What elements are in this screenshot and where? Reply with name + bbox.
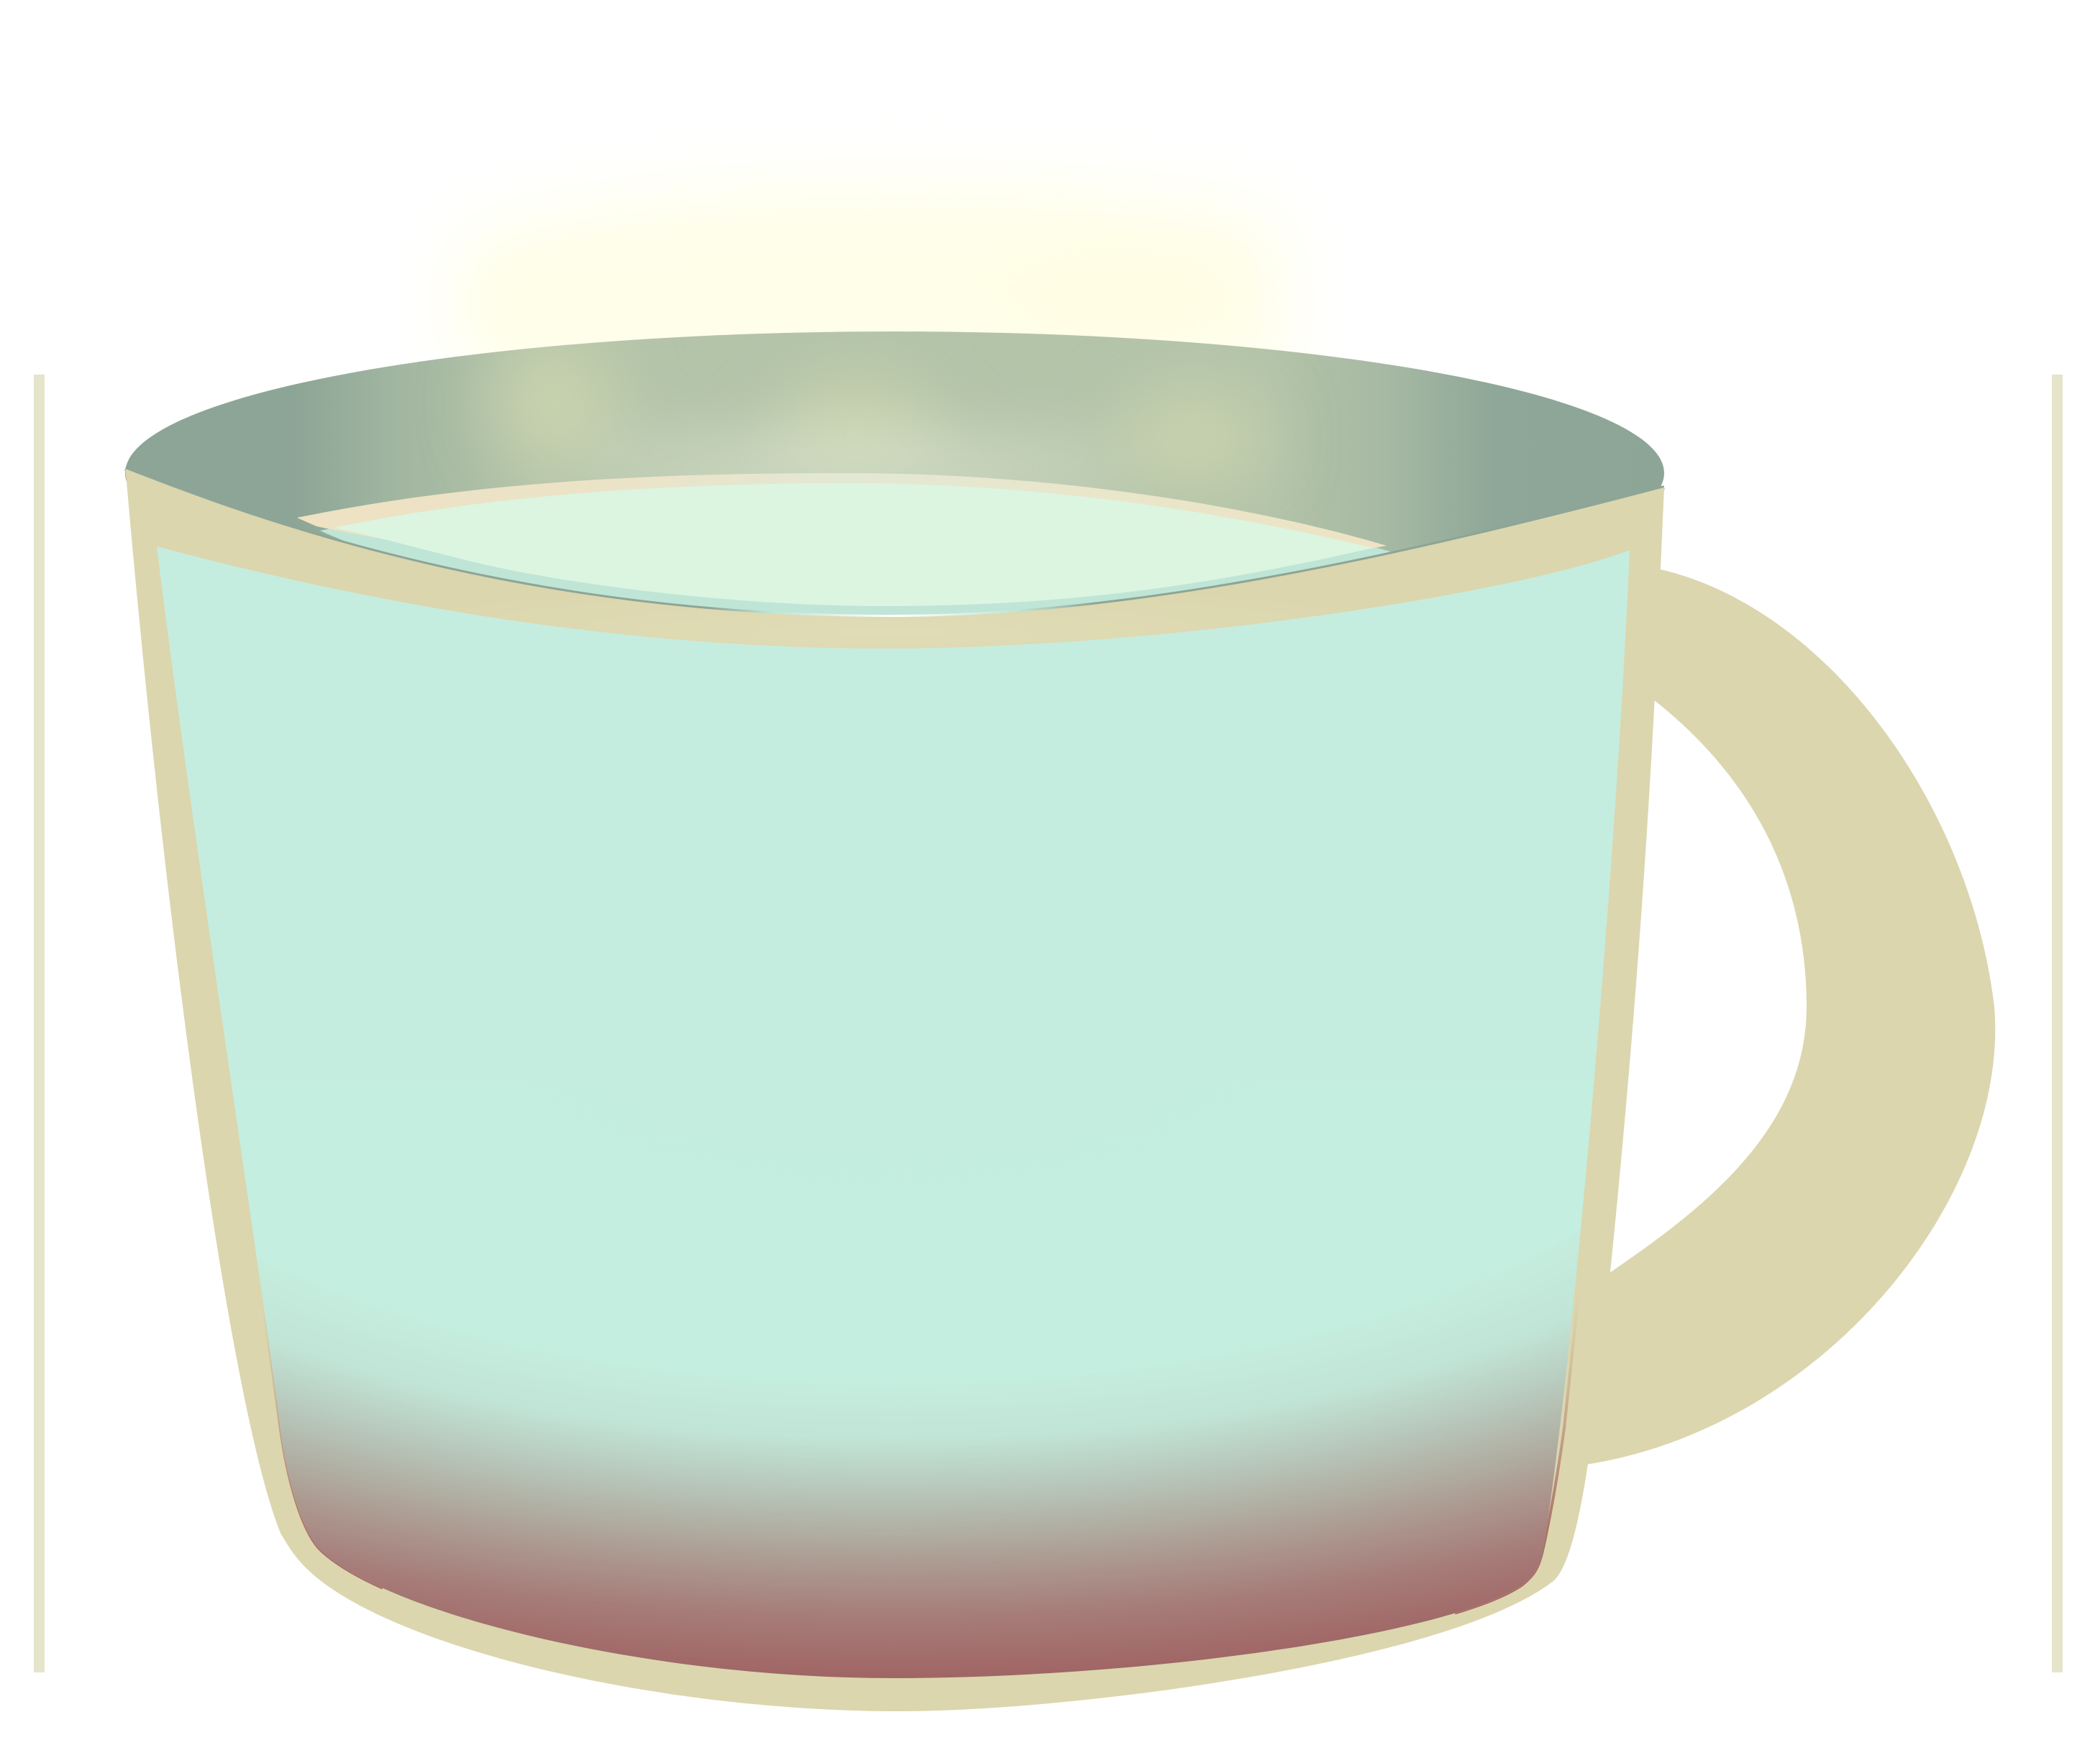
red fade at cup bottom: [230, 1079, 1594, 1678]
liquid band: [320, 493, 1404, 621]
left vertical bar: [34, 375, 45, 1672]
right vertical bar: [2052, 375, 2063, 1672]
right edge tint: [1455, 1273, 1581, 1613]
liquid surface: [334, 483, 1373, 606]
rim glow highlights: [493, 338, 1266, 489]
cup rim interior: [125, 331, 1664, 552]
cup teal panel: [157, 546, 1630, 1678]
liquid edge sliver: [125, 469, 1664, 617]
liquid cream edge: [297, 473, 1387, 575]
steam glow: [453, 188, 1287, 374]
left edge tint: [263, 1301, 383, 1588]
cup handle: [1546, 568, 1995, 1465]
cup body: [125, 469, 1664, 1711]
